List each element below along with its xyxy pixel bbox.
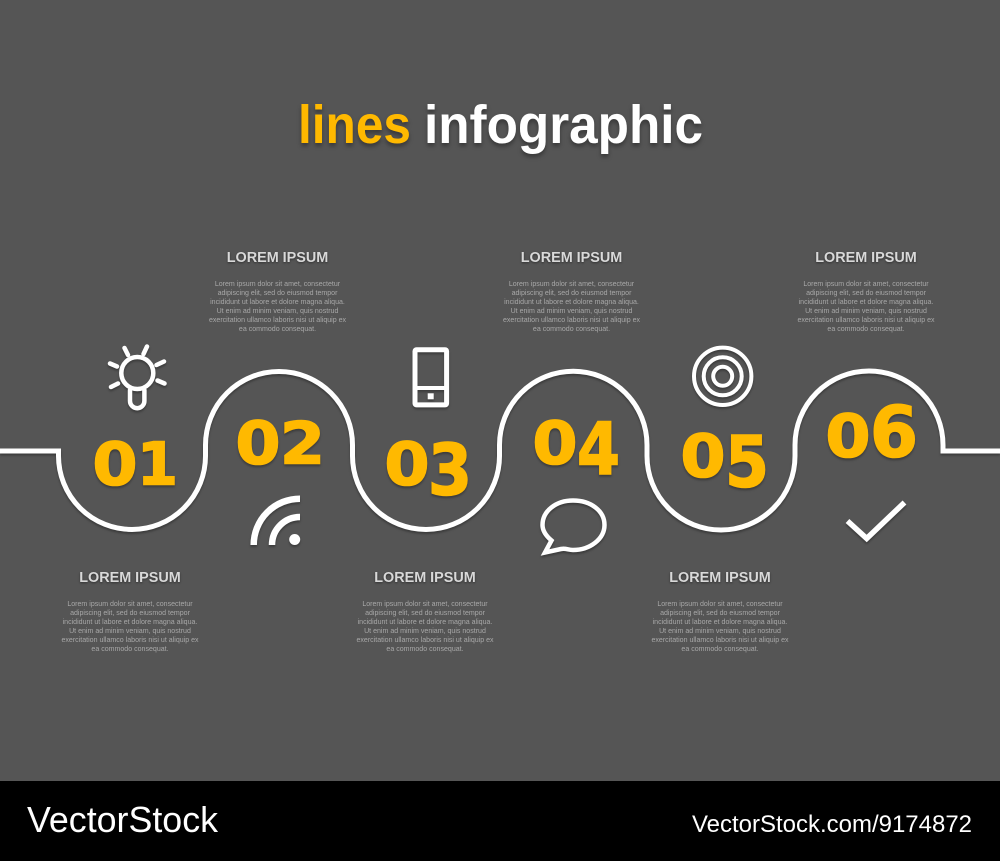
footer url: VectorStock.com/9174872 — [692, 811, 972, 838]
text block: step 02: adipiscing elit, sed do eiusmod tempor — [218, 290, 338, 297]
footer bar — [0, 781, 1000, 861]
text block: step 02 — [209, 250, 347, 333]
text block: step 02: LOREM IPSUM — [227, 250, 328, 266]
text block: step 05: exercitation ullamco laboris nisi ut aliquip ex — [651, 637, 789, 644]
icon: speech bubble — [542, 500, 604, 552]
text block: step 02: ea commodo consequat. — [239, 326, 316, 333]
text block: step 02: exercitation ullamco laboris nisi ut aliquip ex — [209, 317, 347, 324]
text block: step 06: LOREM IPSUM — [815, 250, 917, 266]
text block: step 03: incididunt ut labore et dolore magna aliqua. — [358, 619, 492, 626]
text block: step 03: Lorem ipsum dolor sit amet, consectetur — [362, 601, 488, 608]
step 06 number: 0 — [826, 402, 870, 470]
title: infographic — [424, 95, 703, 155]
step 04 number: 4 — [577, 407, 620, 491]
text block: step 04: LOREM IPSUM — [521, 250, 622, 266]
text block: step 06: exercitation ullamco laboris nisi ut aliquip ex — [797, 317, 935, 324]
text block: step 03: Ut enim ad minim veniam, quis nostrud — [364, 628, 486, 635]
step 03 number — [384, 430, 472, 512]
text block: step 06 — [797, 250, 935, 333]
step 06 number — [826, 392, 918, 474]
icon: light bulb — [110, 346, 164, 408]
text block: step 01: adipiscing elit, sed do eiusmod tempor — [70, 610, 191, 617]
step 05 number: 5 — [725, 422, 769, 504]
step 02 number — [236, 408, 325, 478]
text block: step 06: incididunt ut labore et dolore magna aliqua. — [799, 299, 933, 306]
step 04 number — [532, 407, 620, 491]
text block: step 03 — [356, 570, 494, 653]
icon: smartphone — [415, 350, 447, 405]
step 04 number: 0 — [532, 408, 578, 478]
text block: step 04: incididunt ut labore et dolore magna aliqua. — [504, 299, 639, 306]
icon: wifi — [254, 499, 300, 545]
text block: step 01: Lorem ipsum dolor sit amet, consectetur — [67, 601, 193, 608]
title: lines — [298, 95, 411, 155]
text block: step 01: ea commodo consequat. — [91, 646, 169, 653]
footer logo: VectorStock — [27, 799, 219, 840]
text block: step 05: LOREM IPSUM — [669, 570, 771, 586]
text block: step 06: ea commodo consequat. — [827, 326, 905, 333]
text block: step 01: incididunt ut labore et dolore magna aliqua. — [63, 619, 197, 626]
step 02 number: 0 — [236, 408, 280, 478]
title — [298, 95, 703, 155]
text block: step 06: adipiscing elit, sed do eiusmod tempor — [806, 290, 927, 297]
text block: step 01: Ut enim ad minim veniam, quis nostrud — [69, 628, 191, 635]
text block: step 03: adipiscing elit, sed do eiusmod tempor — [365, 610, 486, 617]
text block: step 06: Lorem ipsum dolor sit amet, consectetur — [803, 281, 929, 288]
icon: check mark — [848, 502, 904, 538]
icon: target — [694, 348, 751, 405]
text block: step 05: incididunt ut labore et dolore magna aliqua. — [653, 619, 787, 626]
text block: step 05: ea commodo consequat. — [681, 646, 759, 653]
step 05 number: 0 — [680, 422, 726, 490]
text block: step 05 — [651, 570, 789, 653]
text block: step 04 — [503, 250, 641, 333]
text block: step 05: Lorem ipsum dolor sit amet, consectetur — [657, 601, 783, 608]
text block: step 01: exercitation ullamco laboris nisi ut aliquip ex — [61, 637, 199, 644]
step 01 number — [92, 430, 178, 498]
step 02 number: 2 — [280, 410, 325, 478]
text block: step 03: ea commodo consequat. — [386, 646, 464, 653]
text block: step 06: Ut enim ad minim veniam, quis nostrud — [805, 308, 927, 315]
step 03 number: 3 — [428, 430, 472, 512]
text block: step 02: Ut enim ad minim veniam, quis nostrud — [217, 308, 338, 315]
text block: step 04: exercitation ullamco laboris nisi ut aliquip ex — [503, 317, 641, 324]
text block: step 04: Ut enim ad minim veniam, quis nostrud — [511, 308, 632, 315]
text block: step 04: Lorem ipsum dolor sit amet, consectetur — [509, 281, 635, 288]
text block: step 03: exercitation ullamco laboris nisi ut aliquip ex — [356, 637, 494, 644]
text block: step 03: LOREM IPSUM — [374, 570, 476, 586]
text block: step 05: Ut enim ad minim veniam, quis nostrud — [659, 628, 781, 635]
text block: step 04: adipiscing elit, sed do eiusmod tempor — [512, 290, 632, 297]
step 05 number — [680, 422, 769, 504]
step 03 number: 0 — [384, 430, 430, 498]
text block: step 04: ea commodo consequat. — [533, 326, 610, 333]
text block: step 05: adipiscing elit, sed do eiusmod tempor — [660, 610, 781, 617]
text block: step 01: LOREM IPSUM — [79, 570, 181, 586]
step 01 number: 1 — [137, 430, 178, 498]
text block: step 02: incididunt ut labore et dolore magna aliqua. — [210, 299, 345, 306]
wavy line — [0, 371, 1000, 530]
text block: step 01 — [61, 570, 199, 653]
text block: step 02: Lorem ipsum dolor sit amet, consectetur — [215, 281, 341, 288]
step 01 number: 0 — [92, 430, 138, 498]
step 06 number: 6 — [870, 392, 918, 474]
